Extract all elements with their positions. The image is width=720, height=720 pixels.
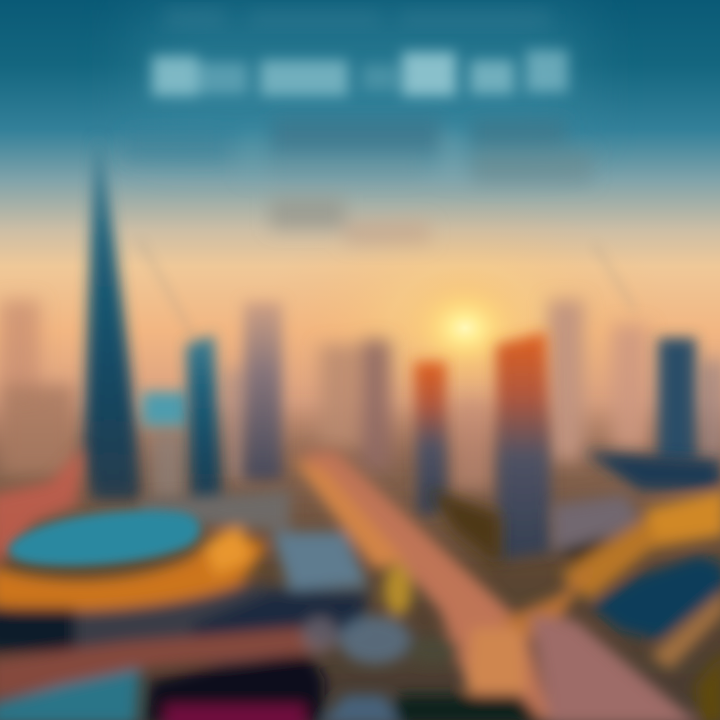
yellow patch [384, 564, 412, 616]
brown dark under towers [140, 490, 290, 530]
blurred subtitle columns [125, 118, 592, 244]
black plaza [145, 655, 325, 720]
left coral curve [0, 445, 85, 565]
dark brown shadow by tower [430, 490, 500, 565]
olive midfield [404, 636, 460, 664]
tall spire tower [84, 135, 140, 500]
city ground [0, 445, 720, 720]
cranes faint [140, 240, 635, 340]
teal stadium dome [9, 510, 200, 566]
dark mid band [0, 585, 370, 670]
blurred headline band [152, 10, 568, 96]
bright vertical separators [240, 130, 264, 180]
orange stadium ring [0, 528, 268, 611]
orange junction [466, 628, 526, 692]
bright main line of heading [152, 50, 568, 96]
teal park right [590, 555, 720, 640]
sun glow [255, 200, 675, 450]
orange right road [560, 495, 720, 600]
distant haze towers [0, 300, 720, 500]
orange strip lower right [650, 590, 720, 670]
centre column [272, 118, 442, 152]
sky centre brightening [140, 10, 580, 140]
olive corner [695, 650, 720, 720]
orange-red slim tower [414, 362, 446, 516]
bottom teal block [0, 668, 140, 720]
grey-blue block right of stadium [272, 532, 368, 590]
dark band right of horizon [585, 452, 720, 490]
tall red-orange tower [496, 332, 552, 560]
red-brown strip [0, 628, 330, 700]
ground base fade [0, 400, 720, 720]
black left block [0, 608, 75, 652]
grey bldg right [552, 495, 640, 552]
right dark tower [658, 338, 696, 463]
magenta glow [165, 705, 305, 720]
blue low block beside spire [142, 392, 188, 426]
lower block [270, 198, 345, 230]
slate foreground [320, 695, 400, 720]
mid teal tower [186, 335, 222, 512]
dark green foreground [385, 695, 545, 720]
pink lower road [530, 615, 700, 720]
main pink diagonal road [300, 450, 550, 720]
faint top line of heading [165, 10, 550, 26]
grey-blue cluster [339, 616, 411, 664]
grey-pink tower [244, 302, 282, 480]
right column [472, 120, 567, 144]
dark navy block [190, 592, 365, 662]
left column [125, 130, 225, 160]
